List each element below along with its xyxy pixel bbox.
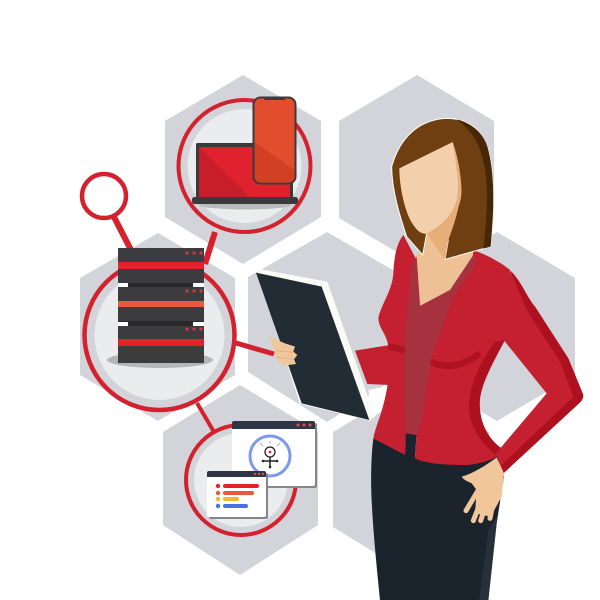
jacket arm — [488, 265, 583, 473]
fingers — [466, 490, 494, 521]
palm — [269, 337, 297, 366]
skirt — [371, 433, 504, 600]
arm shading — [501, 270, 583, 473]
neck and chest — [416, 210, 473, 307]
icon: light bulb dial — [250, 436, 290, 476]
jacket body — [373, 235, 510, 465]
tablet frame — [256, 268, 375, 421]
hexagon background — [80, 75, 575, 575]
small empty node circle — [82, 174, 126, 218]
skirt shading — [479, 517, 497, 600]
face shading — [427, 142, 461, 259]
device circle ring — [178, 100, 310, 232]
hair back — [392, 118, 493, 259]
finger lines — [276, 351, 293, 359]
icon: server rack — [118, 248, 204, 363]
face — [399, 142, 461, 234]
analytics circle ring — [186, 425, 296, 535]
server circle ring — [84, 260, 234, 410]
tablet hand — [269, 337, 297, 366]
device circle background — [188, 109, 302, 223]
server circle background — [94, 270, 224, 400]
sheer top — [404, 255, 476, 435]
tablet screen — [256, 273, 369, 420]
server shadow — [107, 352, 213, 368]
waist hand — [462, 457, 504, 521]
jacket bust fold — [388, 347, 480, 366]
analytics circle — [186, 421, 317, 535]
icon: phone — [254, 97, 296, 184]
palm and thumb — [462, 457, 504, 517]
person — [256, 118, 583, 600]
hair shadow — [457, 119, 493, 249]
shirt glimpse — [368, 386, 388, 417]
device circle — [178, 97, 310, 232]
window: idea — [232, 421, 317, 488]
far arm sleeve — [355, 345, 390, 385]
server circle — [84, 248, 234, 410]
window: list — [207, 471, 268, 519]
icon: laptop — [192, 143, 298, 210]
tablet — [256, 268, 375, 421]
jacket waist shading — [469, 340, 505, 456]
analytics circle background — [194, 433, 288, 527]
connector lines — [113, 215, 274, 432]
